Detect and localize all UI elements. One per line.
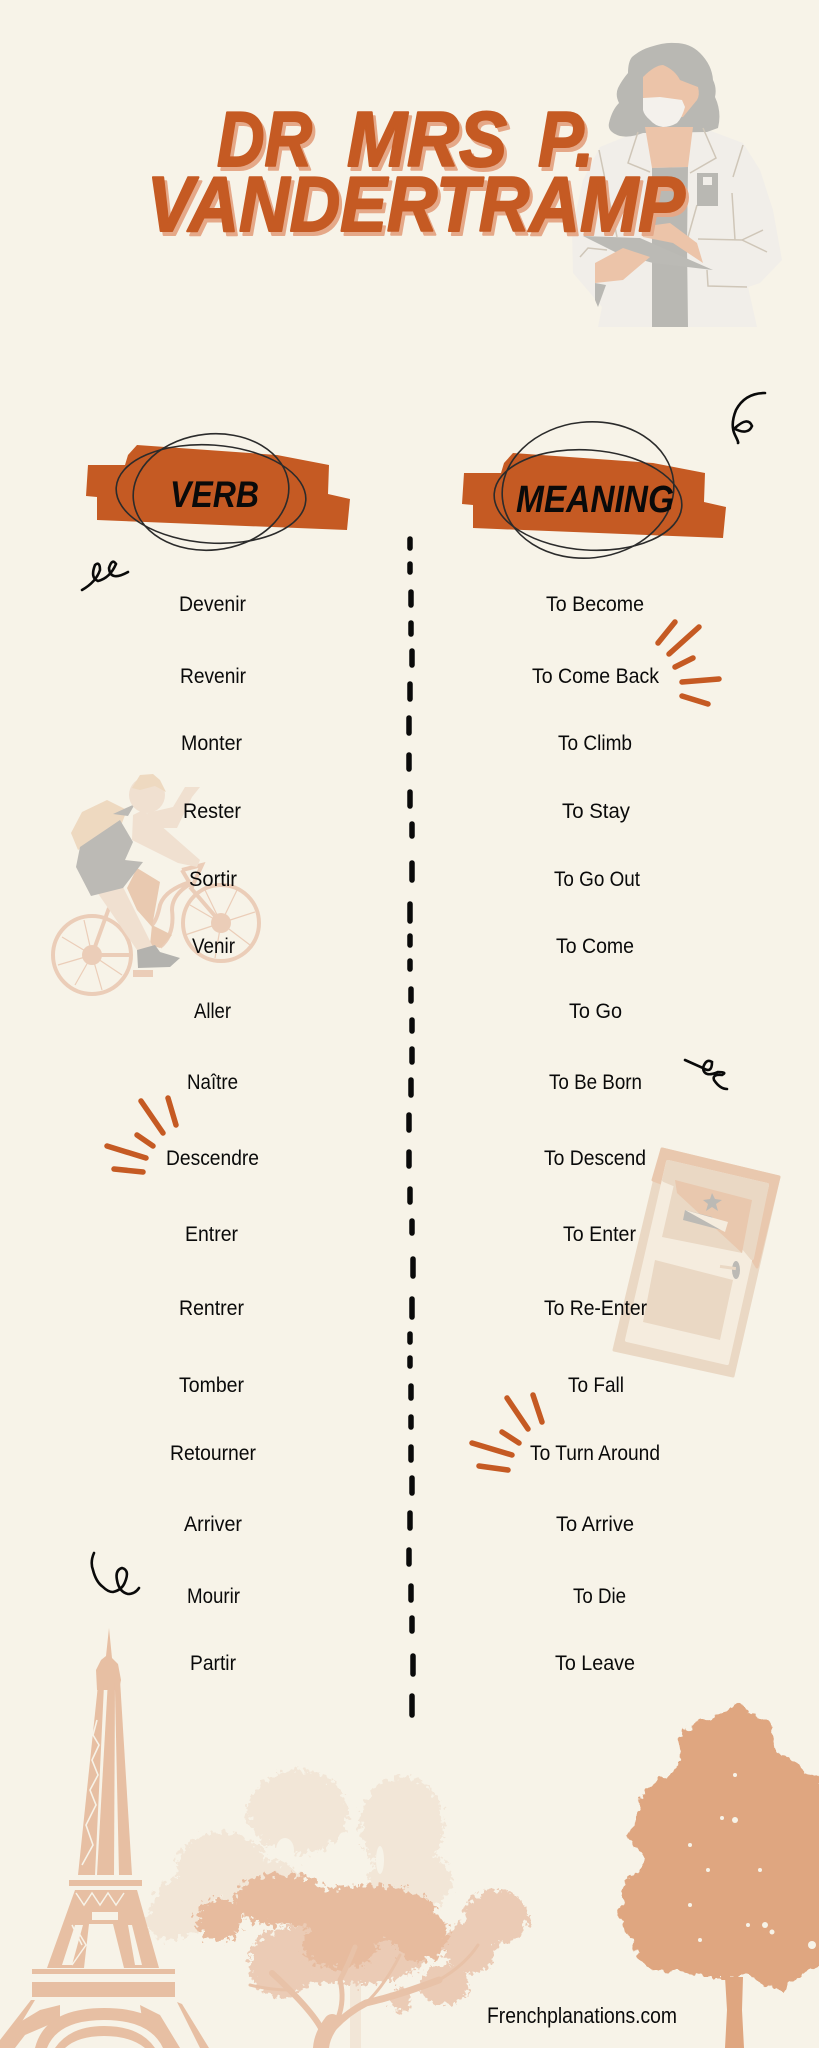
- verb: Arriver: Arriver: [184, 1513, 242, 1536]
- meaning: To Become: To Become: [546, 593, 644, 616]
- title: P.: [541, 99, 597, 187]
- meaning: To Stay: To Stay: [562, 800, 630, 823]
- title: DR: [220, 99, 315, 187]
- header: verb: [86, 426, 350, 558]
- header: verb: VERB: [170, 474, 259, 515]
- divider: dashed line: [409, 539, 413, 1715]
- verb: Entrer: Entrer: [185, 1223, 238, 1246]
- footer: website: Frenchplanations.com: [487, 2003, 677, 2028]
- title: MRS: [350, 99, 510, 187]
- meaning: To Arrive: To Arrive: [556, 1513, 634, 1536]
- verb: Mourir: Mourir: [187, 1585, 240, 1608]
- meaning: To Turn Around: To Turn Around: [530, 1442, 660, 1465]
- icon: burst near Descendre: [107, 1098, 176, 1172]
- icon: squiggle near To Be Born: [685, 1060, 727, 1089]
- icon: squiggle top right: [733, 393, 765, 443]
- title: P.: [538, 95, 594, 183]
- verb: Sortir: Sortir: [189, 868, 237, 891]
- meaning: To Climb: To Climb: [558, 732, 632, 755]
- meaning: To Descend: To Descend: [544, 1147, 646, 1170]
- verb: Tomber: Tomber: [179, 1374, 244, 1397]
- meaning list: [530, 593, 660, 1675]
- meaning: To Go: To Go: [569, 1000, 622, 1023]
- meaning: To Re-Enter: To Re-Enter: [544, 1297, 647, 1320]
- meaning: To Come: To Come: [556, 935, 634, 958]
- verb: Rester: Rester: [183, 800, 241, 823]
- illustration: Eiffel tower: [0, 1628, 209, 2048]
- meaning: To Fall: To Fall: [568, 1374, 624, 1397]
- header: meaning: MEANING: [516, 479, 674, 521]
- header: meaning: [462, 413, 726, 567]
- illustration: doctor: [572, 43, 782, 327]
- verb: Rentrer: Rentrer: [179, 1297, 244, 1320]
- meaning: To Enter: To Enter: [563, 1223, 636, 1246]
- verb: Venir: Venir: [192, 935, 235, 958]
- verb: Retourner: Retourner: [170, 1442, 256, 1465]
- title: VANDERTRAMP: [150, 164, 689, 252]
- verb: Devenir: Devenir: [179, 593, 246, 616]
- title: MRS: [347, 95, 507, 183]
- verb: Aller: Aller: [194, 1000, 231, 1023]
- verb: Descendre: Descendre: [166, 1147, 259, 1170]
- title: VANDERTRAMP: [147, 160, 686, 248]
- illustration: door: [614, 1149, 779, 1376]
- icon: burst near To Turn Around: [472, 1395, 542, 1470]
- icon: burst near To Come Back: [658, 622, 719, 704]
- title: [147, 95, 689, 252]
- title: DR: [217, 95, 312, 183]
- illustration: pale back tree: [146, 1770, 452, 2048]
- illustration: right tree: [620, 1706, 819, 2048]
- verb: Naître: Naître: [187, 1071, 238, 1094]
- icon: squiggle bottom left: [92, 1553, 139, 1594]
- verb: Revenir: Revenir: [180, 665, 246, 688]
- verb: Partir: Partir: [190, 1652, 236, 1675]
- meaning: To Leave: To Leave: [555, 1652, 635, 1675]
- verb: Monter: Monter: [181, 732, 242, 755]
- meaning: To Die: To Die: [573, 1585, 626, 1608]
- illustration: middle tree: [196, 1874, 528, 2048]
- meaning: To Be Born: To Be Born: [549, 1071, 642, 1094]
- illustration: cyclist: [53, 774, 259, 994]
- meaning: To Come Back: To Come Back: [532, 665, 659, 688]
- meaning: To Go Out: To Go Out: [554, 868, 640, 891]
- icon: squiggle left: [82, 562, 128, 590]
- verb list: [166, 593, 259, 1675]
